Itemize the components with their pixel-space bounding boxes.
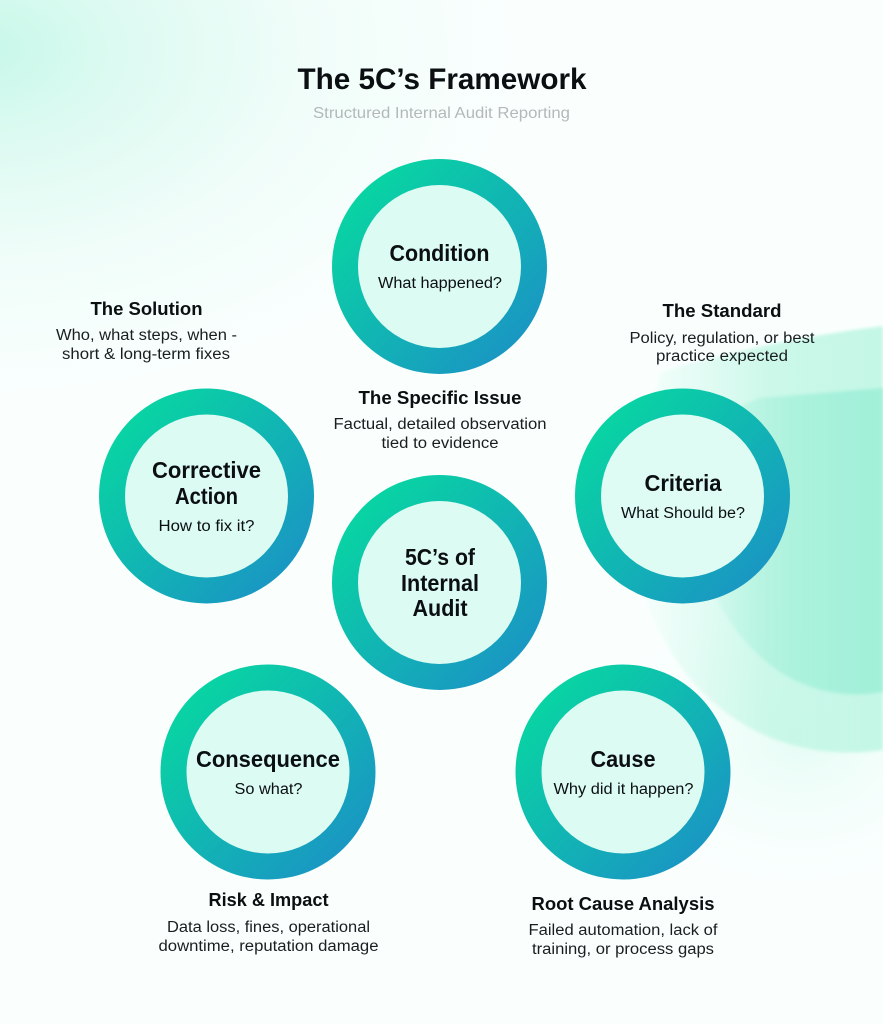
- label: risk and impact: Risk & Impact: [208, 889, 328, 910]
- circle: corrective action: Corrective: [152, 457, 261, 483]
- label: risk and impact: downtime, reputation damage: [158, 938, 378, 955]
- circle: cause: [516, 664, 730, 880]
- label: the standard: The Standard: [662, 300, 782, 321]
- circle: condition: What happened?: [378, 275, 502, 292]
- label: the solution: [56, 298, 237, 363]
- label: the standard: practice expected: [656, 348, 788, 365]
- circle: 5C's of internal audit: Internal: [401, 570, 479, 596]
- label: the specific issue: tied to evidence: [382, 435, 498, 452]
- circle: corrective action: How to fix it?: [158, 518, 255, 535]
- circle: criteria: [575, 388, 790, 604]
- circle: criteria: What Should be?: [621, 505, 745, 522]
- circle: corrective action: [99, 388, 314, 604]
- label: root cause analysis: [528, 893, 718, 958]
- label: the standard: Policy, regulation, or best: [630, 330, 815, 347]
- circle: consequence: [160, 664, 376, 880]
- label: the specific issue: Factual, detailed observation: [334, 416, 546, 433]
- subtitle: Structured Internal Audit Reporting: [313, 105, 570, 122]
- label: root cause analysis: training, or process gaps: [532, 941, 714, 958]
- label: the solution: short & long-term fixes: [62, 346, 230, 363]
- label: the solution: The Solution: [90, 298, 202, 319]
- label: the specific issue: The Specific Issue: [358, 387, 522, 408]
- label: risk and impact: Data loss, fines, operational: [167, 919, 370, 936]
- circle: cause: Cause: [590, 746, 656, 772]
- label: the specific issue: [334, 387, 546, 452]
- circle: 5C's of internal audit: 5C’s of: [405, 544, 475, 570]
- circle: corrective action: Action: [175, 483, 238, 509]
- circle: 5C's of internal audit: [332, 475, 547, 690]
- circle: condition: Condition: [390, 240, 490, 266]
- circle: consequence: Consequence: [196, 746, 340, 772]
- label: the solution: Who, what steps, when -: [56, 327, 237, 344]
- label: root cause analysis: Root Cause Analysis: [532, 893, 714, 914]
- label: root cause analysis: Failed automation, lack of: [528, 922, 718, 939]
- circle: criteria: Criteria: [644, 470, 722, 496]
- circle: consequence: So what?: [234, 781, 303, 798]
- label: risk and impact: [158, 889, 378, 955]
- label: the standard: [630, 300, 815, 365]
- circle: 5C's of internal audit: Audit: [412, 595, 468, 621]
- circle: cause: Why did it happen?: [554, 781, 694, 798]
- title: The 5C’s Framework: [298, 63, 587, 96]
- circle: condition: [332, 159, 547, 374]
